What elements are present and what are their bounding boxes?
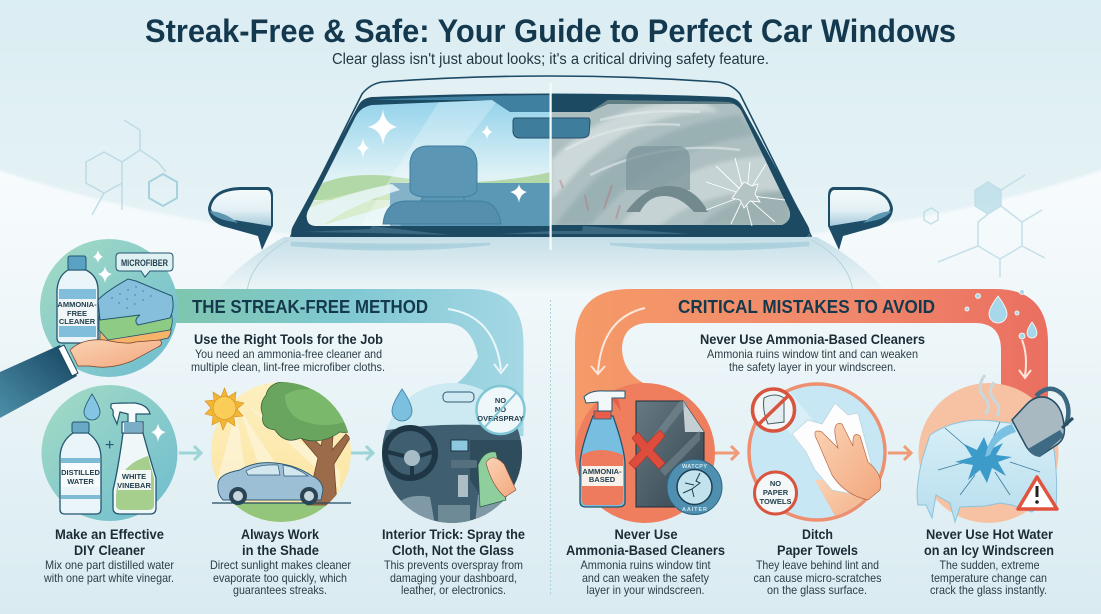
icon: water drop bbox=[392, 389, 412, 421]
tag: microfiber bbox=[116, 253, 173, 277]
icon: paper towels circle bbox=[749, 384, 890, 525]
badge: no paper roll bbox=[752, 389, 794, 431]
badge: no paper towels bbox=[754, 472, 796, 514]
badge: no overspray: NO bbox=[495, 405, 506, 414]
warning text: the safety layer in your windscreen. bbox=[729, 360, 896, 374]
ribbon bbox=[575, 289, 1048, 453]
dotted centre divider bbox=[550, 300, 552, 596]
icon: DIY cleaner circle: DISTILLED bbox=[61, 468, 100, 477]
car hood bbox=[216, 237, 886, 292]
clean glass side bbox=[306, 100, 550, 226]
sun bbox=[205, 388, 244, 430]
arrow bbox=[715, 446, 738, 460]
sparkles bbox=[357, 109, 527, 203]
tip: right tools text: Use the Right Tools for the Job bbox=[194, 332, 383, 347]
step: shade text: guarantees streaks. bbox=[233, 583, 327, 597]
step: shade text: evaporate too quickly, which bbox=[213, 571, 347, 585]
icon: tools circle with bottle, cloths and hand bbox=[0, 239, 178, 418]
warning text: Ammonia ruins window tint and can weaken bbox=[707, 347, 918, 361]
step: interior trick text: This prevents overspray from bbox=[384, 558, 523, 572]
decorative hexagon molecules left bbox=[86, 120, 177, 215]
decorative hexagon molecules right bbox=[924, 175, 1045, 277]
pouring water bbox=[985, 424, 1016, 457]
badge: no overspray: OVERSPRAY bbox=[477, 414, 524, 423]
window tint badge: AAITER bbox=[682, 507, 707, 513]
step: paper towels text: Paper Towels bbox=[777, 543, 858, 558]
icon: DIY cleaner circle bbox=[42, 385, 178, 521]
step: ammonia text: and can weaken the safety bbox=[582, 571, 709, 585]
step: DIY cleaner text: DIY Cleaner bbox=[74, 543, 146, 558]
step: paper towels text: can cause micro-scratches bbox=[754, 571, 882, 585]
step: ammonia text: layer in your windscreen. bbox=[586, 583, 704, 597]
title: Streak-Free & Safe: Your Guide to Perfect Car Windows bbox=[145, 13, 956, 49]
left side mirror bbox=[208, 187, 273, 250]
warning text: Never Use Ammonia-Based Cleaners bbox=[700, 332, 925, 347]
step: interior trick text: Cloth, Not the Glass bbox=[392, 543, 514, 558]
step: ammonia text: Never Use bbox=[614, 527, 678, 542]
hand bbox=[70, 340, 162, 367]
badge: no overspray: NO bbox=[495, 396, 506, 405]
step: DIY cleaner text: Make an Effective bbox=[55, 527, 164, 542]
arrow bbox=[888, 446, 911, 460]
step: interior trick text bbox=[382, 527, 525, 597]
crack burst bbox=[955, 437, 1012, 483]
illustration: car front, clean versus dirty windscreen bbox=[208, 76, 893, 292]
spray bottle bbox=[580, 391, 625, 507]
steam bbox=[980, 375, 999, 416]
red cross bbox=[629, 430, 665, 469]
badge: no overspray bbox=[476, 386, 524, 434]
tip: right tools text: You need an ammonia-free cleaner and bbox=[195, 347, 382, 361]
step: interior trick text: leather, or electronics. bbox=[401, 583, 506, 597]
step: hot water text: on an Icy Windscreen bbox=[924, 543, 1054, 558]
badge: no paper towels: PAPER bbox=[763, 488, 789, 497]
step: DIY cleaner text: Mix one part distilled water bbox=[45, 558, 174, 572]
icon: DIY cleaner circle: WATER bbox=[67, 477, 94, 486]
step: hot water text: temperature change can bbox=[931, 571, 1047, 585]
icon: tools circle with bottle, cloths and hand: CLEANER bbox=[59, 317, 96, 326]
step: hot water text: crack the glass instantly. bbox=[930, 583, 1047, 597]
icon: DIY cleaner circle: VINEBAR bbox=[117, 481, 151, 490]
icon: tools circle with bottle, cloths and hand: FREE bbox=[67, 309, 87, 318]
icon: DIY cleaner circle: + bbox=[105, 437, 114, 454]
warning triangle bbox=[1018, 477, 1057, 509]
step: shade text: in the Shade bbox=[242, 543, 319, 558]
icon: hot water on ice circle bbox=[917, 375, 1073, 523]
spray bottle: AMMONIA- bbox=[582, 467, 622, 476]
step: hot water text bbox=[924, 527, 1054, 597]
step: paper towels text: on the glass surface. bbox=[767, 583, 867, 597]
step: shade text: Always Work bbox=[241, 527, 319, 542]
ribbon curved arrow bbox=[448, 309, 508, 373]
badge: no paper towels: NO bbox=[770, 479, 781, 488]
panel: the streak-free method bbox=[0, 239, 525, 597]
panel: critical mistakes to avoid bbox=[566, 289, 1073, 597]
icon: ammonia circle bbox=[575, 383, 722, 523]
step: interior trick text: damaging your dashboard, bbox=[390, 571, 517, 585]
step: DIY cleaner text bbox=[43, 527, 174, 585]
wipers bbox=[303, 226, 690, 235]
icon: interior circle bbox=[380, 383, 525, 530]
rear-view mirror bbox=[513, 118, 590, 138]
step: shade text bbox=[210, 527, 351, 597]
badge: no paper towels: TOWELS bbox=[760, 497, 791, 506]
ribbon arrow right bbox=[1019, 340, 1031, 378]
step: ammonia text: Ammonia ruins window tint bbox=[580, 558, 711, 572]
icon: tools circle with bottle, cloths and hand: AMMONIA- bbox=[57, 300, 97, 309]
tip: right tools text: multiple clean, lint-free microfiber cloths. bbox=[191, 360, 385, 374]
arrow bbox=[351, 446, 373, 460]
icon: shade circle with sun, tree and car bbox=[204, 382, 351, 522]
window tint badge bbox=[667, 460, 722, 514]
warning text bbox=[700, 332, 925, 374]
spray bottle: BASED bbox=[589, 475, 616, 484]
step: DIY cleaner text: with one part white vinegar. bbox=[43, 571, 174, 585]
heading: CRITICAL MISTAKES TO AVOID bbox=[678, 296, 935, 317]
heading: THE STREAK-FREE METHOD bbox=[192, 296, 428, 317]
step: ammonia text bbox=[566, 527, 725, 597]
kettle bbox=[1012, 389, 1073, 457]
tree crown bbox=[260, 382, 348, 442]
windscreen frame bbox=[291, 94, 810, 237]
step: interior trick text: Interior Trick: Spray the bbox=[382, 527, 525, 542]
step: paper towels text bbox=[754, 527, 882, 597]
jacket sleeve bbox=[0, 345, 77, 418]
subtitle: Clear glass isn't just about looks; it's a critical driving safety feature. bbox=[332, 51, 769, 68]
tag: microfiber: MICROFIBER bbox=[121, 258, 168, 268]
ice block bbox=[917, 420, 1057, 522]
step: shade text: Direct sunlight makes cleaner bbox=[210, 558, 351, 572]
step: paper towels text: They leave behind lint and bbox=[756, 558, 879, 572]
ribbon bbox=[172, 289, 524, 440]
hand holding green cloth bbox=[478, 452, 516, 507]
tint film bbox=[636, 401, 704, 507]
step: hot water text: Never Use Hot Water bbox=[926, 527, 1054, 542]
icon: DIY cleaner circle: WHITE bbox=[122, 472, 146, 481]
car bbox=[218, 463, 323, 505]
step: ammonia text: Ammonia-Based Cleaners bbox=[566, 543, 725, 558]
water drops bbox=[965, 290, 1037, 339]
window tint badge: WATCPY bbox=[682, 464, 707, 470]
step: paper towels text: Ditch bbox=[802, 527, 833, 542]
tip: right tools text bbox=[191, 332, 385, 374]
tree trunk bbox=[301, 434, 350, 506]
centre divider line bbox=[550, 83, 552, 250]
car roof and pillars bbox=[291, 76, 811, 236]
right side mirror bbox=[828, 187, 893, 250]
windscreen crack bbox=[706, 158, 785, 226]
ribbon curved arrow left bbox=[591, 308, 645, 374]
seat bbox=[383, 146, 501, 224]
step: hot water text: The sudden, extreme bbox=[940, 558, 1040, 572]
dirty glass side bbox=[551, 96, 796, 231]
arrow bbox=[179, 446, 201, 460]
